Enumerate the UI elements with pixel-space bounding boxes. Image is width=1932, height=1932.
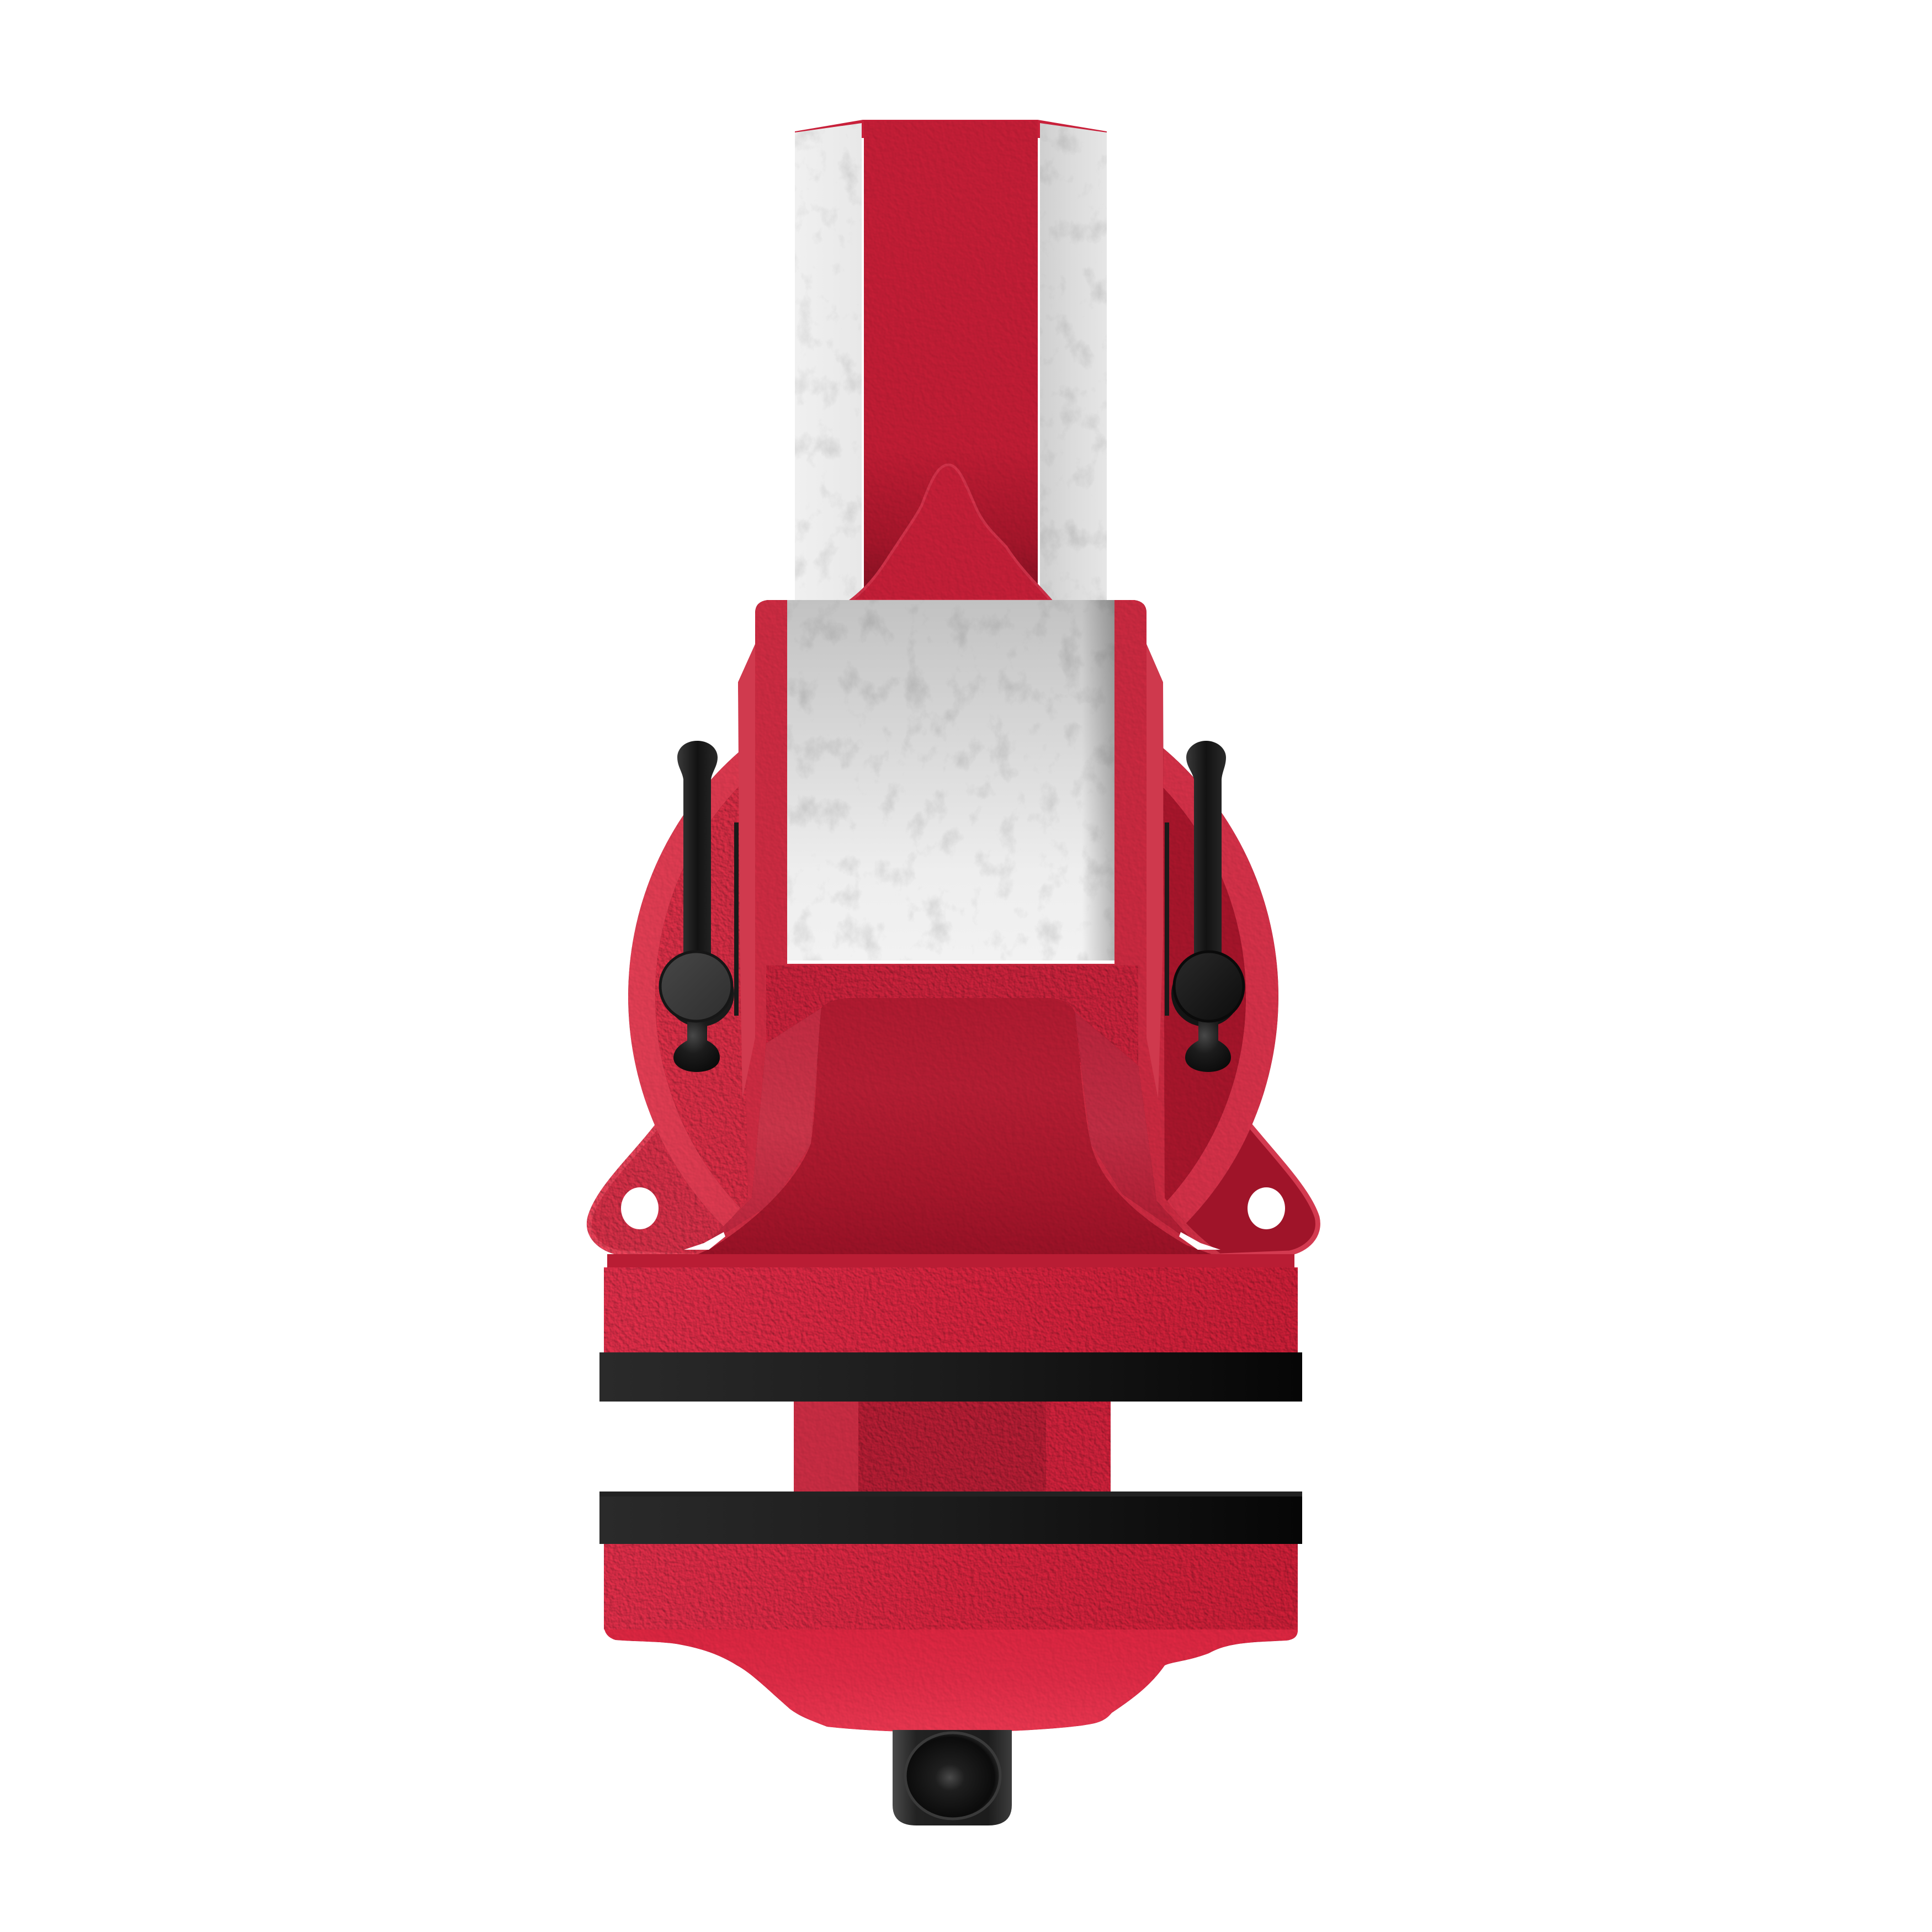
left strip xyxy=(794,1402,858,1493)
upper jaw xyxy=(604,1254,1298,1354)
column top edge xyxy=(795,120,1107,138)
thin plates behind arms xyxy=(734,822,1169,1016)
plate right shade xyxy=(1082,600,1114,962)
locking handle right xyxy=(1171,741,1244,1072)
lower neck and ball xyxy=(1185,1018,1231,1072)
main vise body xyxy=(693,600,1223,1255)
centre strip xyxy=(858,1402,1046,1493)
mounting holes and gaps xyxy=(621,1187,1285,1250)
shoulder block under silver plate xyxy=(766,965,1138,1065)
column right silver face xyxy=(1040,123,1107,601)
upper black jaw insert xyxy=(599,1352,1302,1402)
plate bottom highlight xyxy=(787,960,1114,964)
slit left xyxy=(684,1232,725,1250)
plate left xyxy=(734,822,739,1016)
socket ball xyxy=(905,1733,1000,1819)
disc outer ring xyxy=(628,671,1278,1321)
hole right xyxy=(1248,1187,1285,1229)
hexagonal slide column xyxy=(795,120,1107,601)
locking handle left xyxy=(660,741,734,1072)
mounting lug right xyxy=(1126,1118,1318,1259)
disc inner textured left half xyxy=(655,696,951,1297)
lower jaw flange and belly xyxy=(604,1626,1298,1732)
swivel base disc xyxy=(628,671,1278,1321)
disc inner face xyxy=(655,696,1246,1297)
left outer facet xyxy=(738,644,755,1098)
lower jaw body xyxy=(604,1544,1298,1732)
screw handle socket xyxy=(893,1730,1012,1825)
slide column between jaws xyxy=(794,1402,1111,1493)
knob xyxy=(660,952,732,1021)
rod and top ball xyxy=(1186,741,1226,958)
knob xyxy=(1174,952,1244,1021)
lower black jaw insert xyxy=(599,1492,1302,1544)
silver top plate xyxy=(787,600,1114,964)
upper jaw lip xyxy=(607,1254,1294,1267)
arm facets xyxy=(738,644,1163,1098)
raised fin on column xyxy=(851,465,1051,601)
right outer facet xyxy=(1147,644,1163,1098)
slit right xyxy=(1179,1232,1220,1250)
hole left xyxy=(621,1187,659,1229)
column left silver face xyxy=(795,123,862,601)
socket barrel xyxy=(893,1730,1012,1825)
insert front xyxy=(599,1496,1302,1544)
central arched surface xyxy=(696,998,1214,1255)
upper jaw face xyxy=(604,1267,1298,1354)
rod and top ball xyxy=(677,741,718,958)
lower neck and ball xyxy=(673,1018,720,1072)
plate right xyxy=(1165,822,1169,1016)
right flared shoulder xyxy=(1075,1012,1198,1246)
knob shadow xyxy=(666,960,734,1027)
plate surface xyxy=(787,600,1114,962)
mounting lug left xyxy=(589,1118,784,1259)
left flared shoulder xyxy=(701,1008,821,1249)
column red centre face xyxy=(864,121,1038,601)
knob shadow xyxy=(1171,960,1240,1027)
insert top surface xyxy=(599,1492,1302,1497)
right strip xyxy=(1046,1402,1111,1493)
lower jaw face xyxy=(604,1544,1298,1630)
